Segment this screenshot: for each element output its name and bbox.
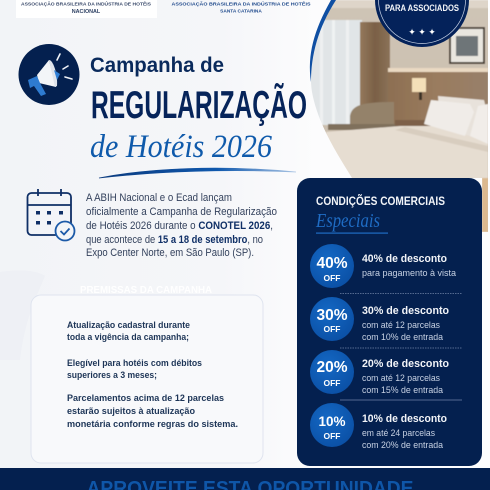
offer: 30%: 30% de desconto — [362, 305, 449, 317]
premise list: monetária conforme regras do sistema. — [67, 419, 238, 430]
logo: ABIH Nacional: NACIONAL — [72, 9, 101, 15]
offer: 20%: com até 12 parcelas — [362, 373, 440, 383]
offer: 10% — [310, 403, 447, 450]
intro text: Expo Center Norte, em São Paulo (SP). — [86, 247, 254, 259]
title: Campanha de — [90, 53, 224, 77]
title: REGULARIZAÇÃO — [91, 83, 307, 127]
offer: 10%: 10% de desconto — [362, 413, 447, 425]
intro text: A ABIH Nacional e o Ecad lançam — [86, 192, 232, 204]
intro text — [86, 192, 277, 259]
script subheading: Especiais — [315, 210, 380, 232]
intro text: que acontece de 15 a 18 de setembro, no — [86, 234, 263, 246]
logo: ABIH Nacional — [16, 0, 157, 18]
offer: 20% — [310, 350, 449, 395]
intro text: oficialmente a Campanha de Regularização — [86, 206, 277, 218]
premise list: estarão sujeitos à atualização — [67, 406, 195, 417]
premise list: Elegível para hotéis com débitos — [67, 358, 202, 369]
offer: 30%: com até 12 parcelas — [362, 320, 440, 330]
title — [90, 53, 307, 165]
offer: 30% — [310, 297, 449, 342]
heading: premissas: PREMISSAS DA CAMPANHA — [80, 285, 212, 296]
offer: 20%: 20% de desconto — [362, 358, 449, 370]
offer: 20%: com 15% de entrada — [362, 385, 444, 395]
badge: para associados: ✦ ✦ ✦ — [408, 27, 436, 37]
offer: 40% — [310, 244, 457, 288]
title underline swoosh — [99, 168, 296, 178]
badge: para associados: PARA ASSOCIADOS — [385, 2, 459, 13]
panel: condições comerciais — [297, 178, 482, 466]
offer: 40%: para pagamento à vista — [362, 268, 457, 278]
icon: megaphone — [18, 44, 80, 105]
blue arc around photo — [310, 0, 336, 82]
premise list — [67, 320, 238, 430]
premise list: Atualização cadastral durante — [67, 320, 190, 331]
offer: 30%: OFF — [324, 324, 340, 334]
intro text: de Hotéis 2026 durante o CONOTEL 2026, — [86, 220, 273, 232]
panel heading: CONDIÇÕES COMERCIAIS — [316, 195, 445, 208]
offer: 20%: 20% — [316, 359, 348, 376]
offer: 10%: com 20% de entrada — [362, 440, 444, 450]
title: de Hotéis 2026 — [90, 129, 272, 165]
offer: 30%: com 10% de entrada — [362, 332, 444, 342]
offer: 10%: OFF — [324, 431, 340, 441]
offer: 10%: 10% — [318, 414, 346, 429]
offer: 20%: OFF — [324, 378, 340, 388]
offer: 10%: em até 24 parcelas — [362, 428, 435, 438]
premise list: superiores a 3 meses; — [67, 370, 157, 381]
premise list: toda a vigência da campanha; — [67, 332, 189, 343]
hotel room photo — [300, 0, 490, 240]
panel: premissas da campanha — [31, 285, 263, 463]
logo: ABIH Santa Catarina — [172, 0, 310, 14]
offer: 40%: 40% de desconto — [362, 253, 447, 265]
logo: ABIH Santa Catarina: SANTA CATARINA — [220, 8, 262, 14]
logo: ABIH Santa Catarina: ASSOCIAÇÃO BRASILEIRA DA INDÚSTRIA DE HOTÉIS — [172, 0, 310, 6]
offer: 40%: OFF — [324, 273, 340, 283]
premise list: Parcelamentos acima de 12 parcelas — [67, 393, 224, 404]
logo: ABIH Nacional: ASSOCIAÇÃO BRASILEIRA DA INDÚSTRIA DE HOTÉIS — [21, 0, 151, 6]
badge: para associados — [375, 0, 469, 47]
offer: 40%: 40% — [316, 255, 348, 272]
offer: 30%: 30% — [316, 307, 348, 324]
icon: calendar — [28, 189, 74, 240]
bottom banner — [0, 468, 490, 490]
